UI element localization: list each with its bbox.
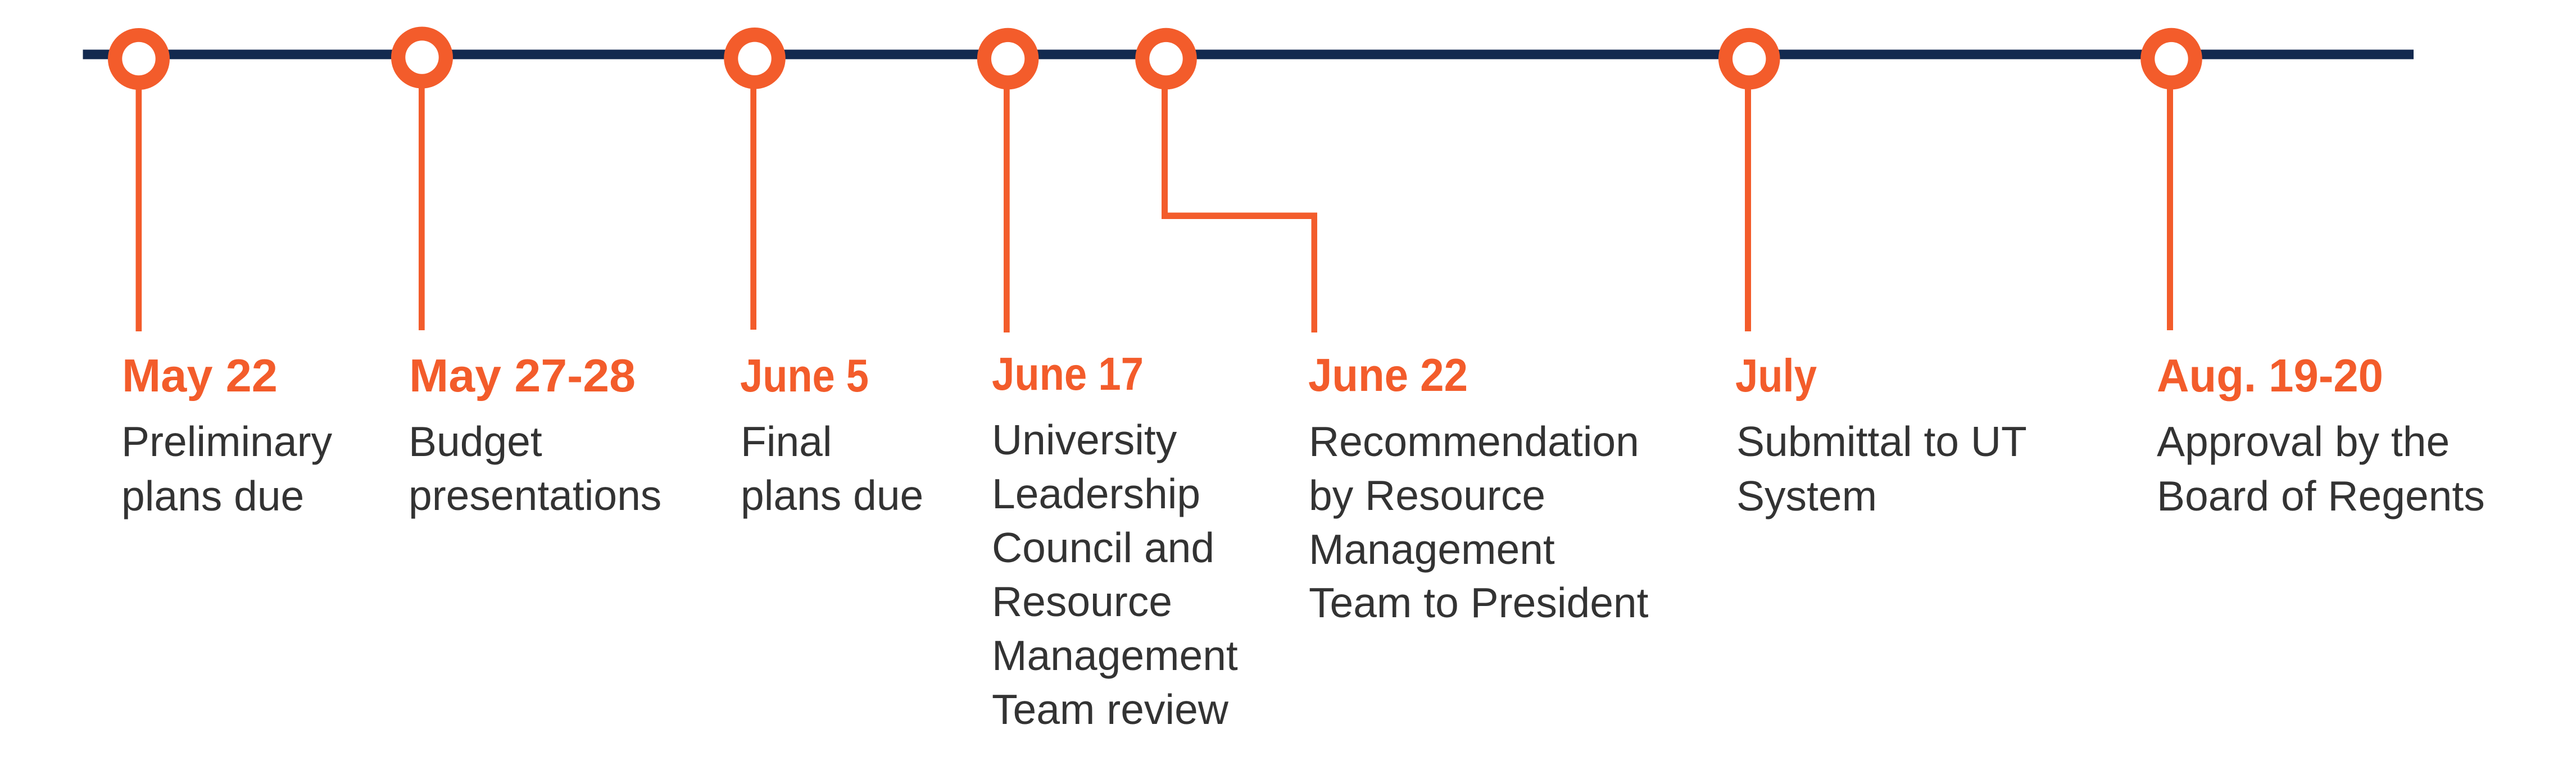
description: Submittal to UT (1736, 418, 2027, 465)
description: by Resource (1309, 472, 1545, 519)
marker and connector (108, 28, 170, 331)
description: Approval by the (2157, 418, 2450, 465)
milestone: Aug. 19-20 (2140, 28, 2485, 520)
description: Team review (992, 686, 1229, 733)
marker and connector (724, 28, 786, 330)
date: May 22 (122, 349, 278, 402)
description: Preliminary (121, 418, 333, 465)
description: Management (992, 632, 1238, 679)
description: Management (1309, 526, 1555, 573)
date: June 22 (1308, 349, 1468, 401)
description: Budget (409, 418, 542, 465)
description: Council and (992, 524, 1214, 571)
description: Recommendation (1309, 418, 1639, 465)
marker and connector (1718, 28, 1780, 331)
marker and connector (391, 27, 453, 330)
description: System (1736, 472, 1877, 520)
milestone: June 22 (1135, 28, 1649, 626)
milestone: June 5 (724, 28, 923, 519)
marker and stepped connector (1135, 28, 1317, 332)
description: plans due (741, 472, 923, 519)
date: May 27-28 (409, 349, 636, 402)
marker and connector (2140, 28, 2202, 330)
date: June 5 (740, 349, 869, 402)
date: Aug. 19-20 (2157, 349, 2383, 402)
description: plans due (121, 472, 304, 520)
date: June 17 (992, 348, 1144, 400)
description: Team to President (1309, 579, 1649, 626)
milestone: June 17 (977, 28, 1238, 733)
description: Final (741, 418, 832, 465)
milestone: May 22 (108, 28, 333, 520)
marker and connector (977, 28, 1038, 332)
description: presentations (409, 472, 661, 519)
timeline bar (83, 49, 2414, 59)
milestone: May 27-28 (391, 27, 661, 519)
description: University (992, 416, 1177, 463)
description: Board of Regents (2157, 472, 2485, 520)
date: July (1735, 349, 1817, 402)
milestone: July (1718, 28, 2027, 520)
description: Resource (992, 578, 1172, 625)
description: Leadership (992, 470, 1200, 517)
